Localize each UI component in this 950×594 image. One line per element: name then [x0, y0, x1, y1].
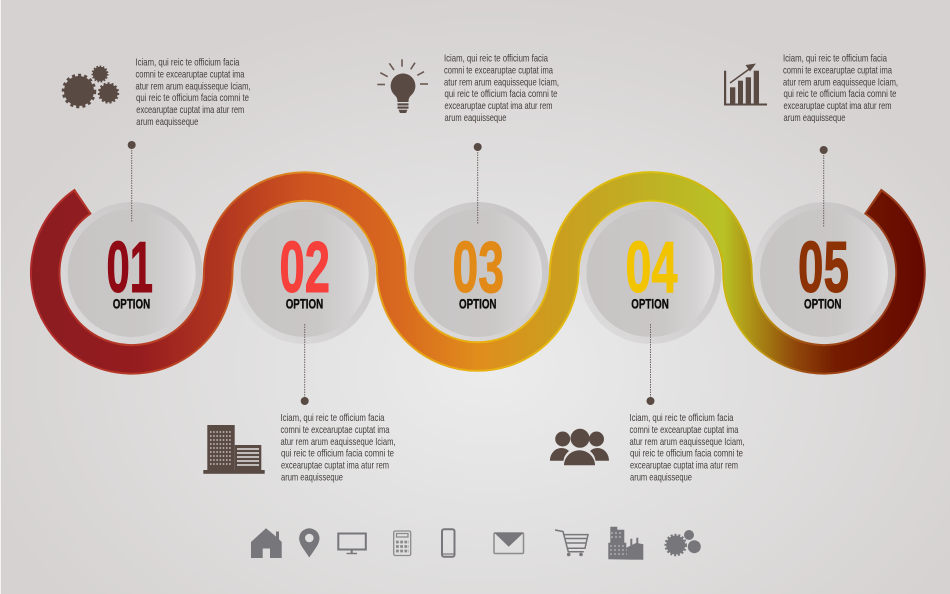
icon: growth chart [724, 64, 767, 106]
circle 3 [407, 202, 549, 344]
text block 3: atur rem arum eaquisseque Iciam, [444, 76, 559, 88]
text block 2: Iciam, qui reic te officium facia [280, 412, 385, 424]
icon: light bulb [377, 59, 428, 113]
icon: shopping cart [555, 530, 588, 556]
text block 1: atur rem arum eaquisseque Iciam, [136, 80, 250, 92]
number 05: 05 [798, 227, 849, 308]
circle 5 [753, 202, 895, 344]
number 02: OPTION [286, 296, 323, 311]
number 01 [106, 227, 153, 311]
connector 5 [820, 146, 828, 227]
circle 4 [580, 202, 722, 344]
text block 1: excearuptae cuptat ima atur rem [136, 104, 244, 116]
text block 2: arum eaquisseque [281, 472, 343, 484]
text block 3: Iciam, qui reic te officium facia [444, 52, 548, 64]
text block 5: arum eaquisseque [784, 112, 846, 124]
text block 4: atur rem arum eaquisseque Iciam, [630, 436, 744, 448]
text block 1: qui reic te officium facia comni te [136, 92, 249, 104]
text block 1: arum eaquisseque [136, 116, 198, 128]
number 04: 04 [626, 227, 678, 308]
text block 2: comni te excearuptae cuptat ima [280, 424, 390, 436]
number 02: 02 [280, 227, 330, 308]
icon: people [550, 429, 609, 465]
number 04: OPTION [631, 296, 669, 311]
text block 4: Iciam, qui reic te officium facia [630, 412, 734, 424]
icon: home [251, 528, 282, 558]
number 02 [280, 227, 330, 311]
text block 3: comni te excearuptae cuptat ima [444, 64, 553, 76]
left edge highlight [0, 0, 1, 594]
text block 4 [630, 412, 744, 484]
text block 5: Iciam, qui reic te officium facia [783, 52, 887, 64]
wave ribbon [45, 186, 910, 359]
text block 2: atur rem arum eaquisseque Iciam, [280, 436, 396, 448]
text block 5: comni te excearuptae cuptat ima [783, 64, 892, 76]
icon: phone [442, 529, 454, 557]
icon: factory [608, 527, 643, 560]
text block 5 [783, 52, 898, 124]
icon: gears [64, 66, 118, 106]
number 05: OPTION [804, 296, 842, 311]
circle 2 [234, 202, 376, 344]
number 05 [798, 227, 849, 311]
text block 2: excearuptae cuptat ima atur rem [281, 460, 389, 472]
number 01: OPTION [113, 296, 150, 311]
text block 4: comni te excearuptae cuptat ima [630, 424, 739, 436]
connector 2 [301, 324, 309, 405]
text block 4: excearuptae cuptat ima atur rem [630, 460, 738, 472]
text block 3: qui reic te officium facia comni te [444, 88, 558, 100]
text block 1 [136, 56, 250, 128]
number 03: 03 [452, 227, 504, 308]
text block 5: qui reic te officium facia comni te [784, 88, 897, 100]
text block 3: arum eaquisseque [444, 112, 507, 124]
connector 3 [474, 143, 482, 224]
text block 5: atur rem arum eaquisseque Iciam, [783, 76, 898, 88]
number 03 [452, 227, 504, 311]
text block 1: comni te excearuptae cuptat ima [136, 68, 245, 80]
text block 3: excearuptae cuptat ima atur rem [444, 100, 553, 112]
icon: monitor [338, 534, 366, 554]
icon: calculator [394, 531, 411, 556]
text block 4: qui reic te officium facia comni te [630, 448, 743, 460]
circle 1 [61, 202, 203, 344]
text block 4: arum eaquisseque [630, 472, 692, 484]
text block 1: Iciam, qui reic te officium facia [136, 56, 240, 68]
icon: map pin [299, 528, 320, 558]
number 04 [626, 227, 678, 311]
icon: envelope [494, 532, 524, 554]
text block 5: excearuptae cuptat ima atur rem [784, 100, 892, 112]
connector 4 [646, 324, 654, 405]
text block 2: qui reic te officium facia comni te [281, 448, 394, 460]
connector 1 [128, 141, 136, 222]
icon: buildings [203, 425, 265, 474]
number 01: 01 [106, 227, 153, 308]
number 03: OPTION [459, 296, 496, 311]
text block 2 [280, 412, 396, 484]
text block 3 [444, 52, 559, 124]
icon: gears small [666, 530, 701, 555]
